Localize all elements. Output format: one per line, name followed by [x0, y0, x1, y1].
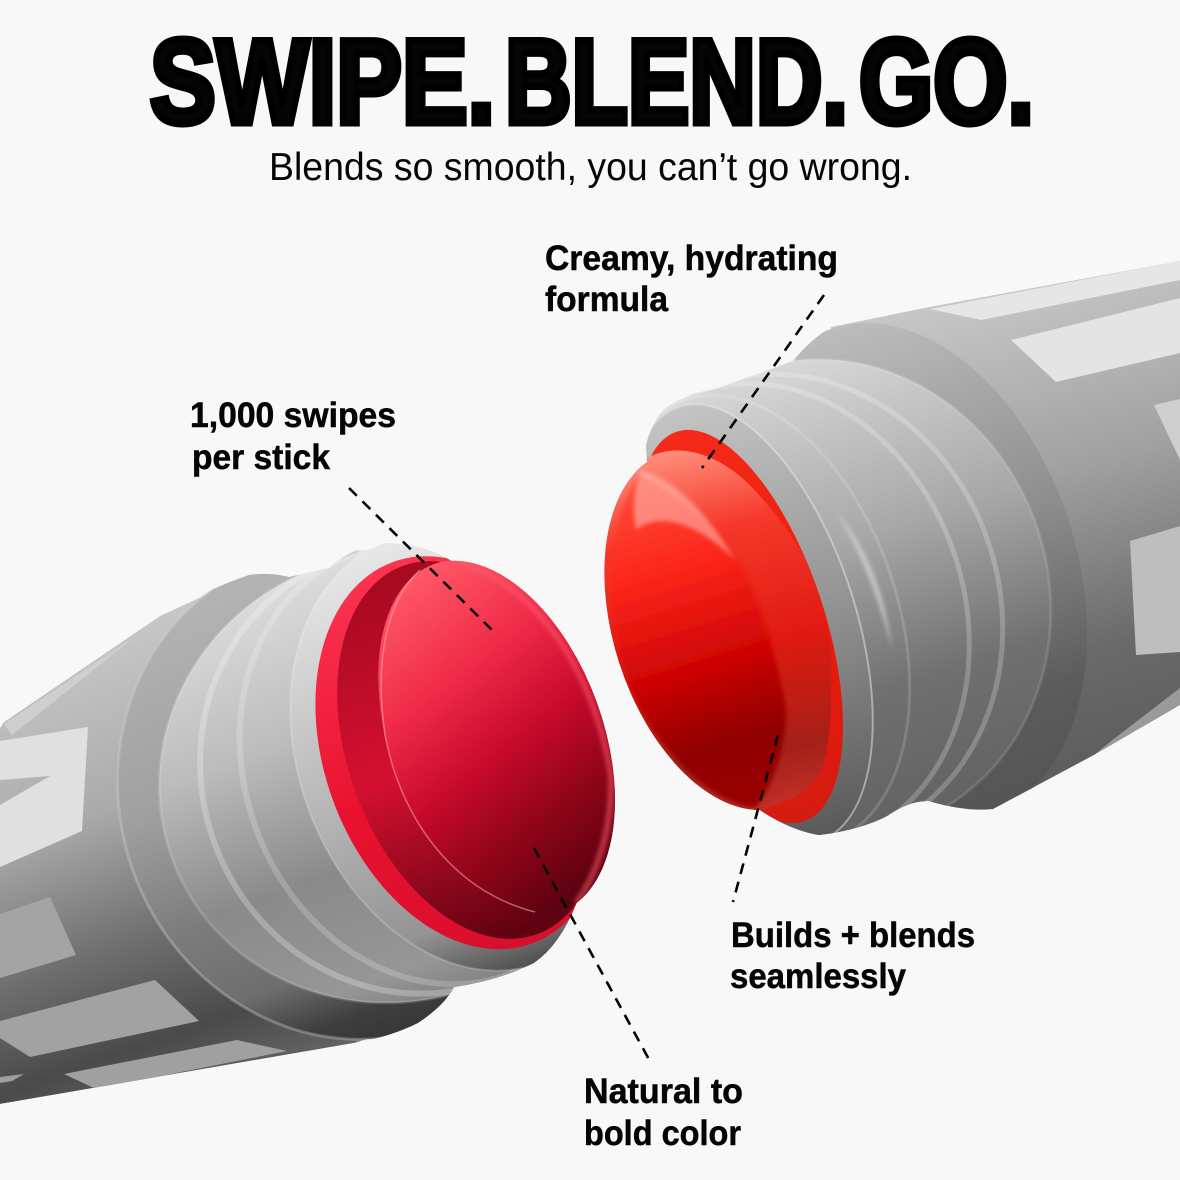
right dome: [604, 450, 831, 810]
right rim: [638, 404, 874, 835]
right stick decals: [930, 261, 1180, 755]
leader line: natural: [534, 848, 652, 1065]
left stick collar and red bullet: [116, 543, 615, 1041]
callout: builds and blends seamlessly: Builds + blends: [731, 916, 975, 955]
leader line: creamy: [702, 295, 824, 468]
callout: 1,000 swipes per stick: 1,000 swipes: [190, 396, 396, 435]
right neck ridges: [604, 359, 1052, 835]
left stick decals: [0, 635, 287, 1089]
left dome edge glow: [452, 561, 611, 903]
callout: creamy hydrating formula: formula: [545, 280, 668, 319]
left neck ridges: [158, 549, 615, 1004]
callout: natural to bold color: [584, 1072, 743, 1153]
callout: builds and blends seamlessly: seamlessly: [730, 957, 907, 996]
right red ring: [650, 430, 843, 824]
right stick body: [831, 261, 1180, 809]
left dome inner line: [381, 570, 535, 912]
left stick: red tint stick lying toward lower left: [0, 543, 615, 1104]
right shoulder ring: [778, 323, 1086, 810]
left dome: [378, 560, 615, 914]
left stick body: [0, 596, 418, 1104]
left shoulder ring: [116, 550, 516, 1041]
right collar streak highlight: [841, 519, 892, 644]
title: [150, 15, 1034, 149]
right stick collar and red bullet: [604, 323, 1086, 835]
right stick: orange red stick lying toward upper right: [604, 261, 1180, 835]
callout: builds and blends seamlessly: [730, 916, 975, 996]
callout: creamy hydrating formula: [545, 239, 838, 319]
leader line: swipes: [349, 488, 492, 630]
title: GO.: [859, 15, 1034, 149]
left red ring: [315, 556, 591, 950]
callout: natural to bold color: bold color: [584, 1114, 741, 1153]
subtitle: Blends so smooth, you can’t go wrong.: [269, 146, 912, 189]
title: SWIPE.: [150, 15, 495, 149]
title: BLEND.: [505, 15, 848, 149]
callout: 1,000 swipes per stick: [190, 396, 396, 477]
right dome core: [610, 475, 786, 808]
left rim: [290, 543, 602, 972]
right dome highlight: [634, 470, 735, 560]
callout: 1,000 swipes per stick: per stick: [192, 438, 331, 477]
callout: creamy hydrating formula: Creamy, hydrating: [545, 239, 838, 278]
leader line: builds: [733, 735, 778, 902]
callout: natural to bold color: Natural to: [584, 1072, 743, 1111]
